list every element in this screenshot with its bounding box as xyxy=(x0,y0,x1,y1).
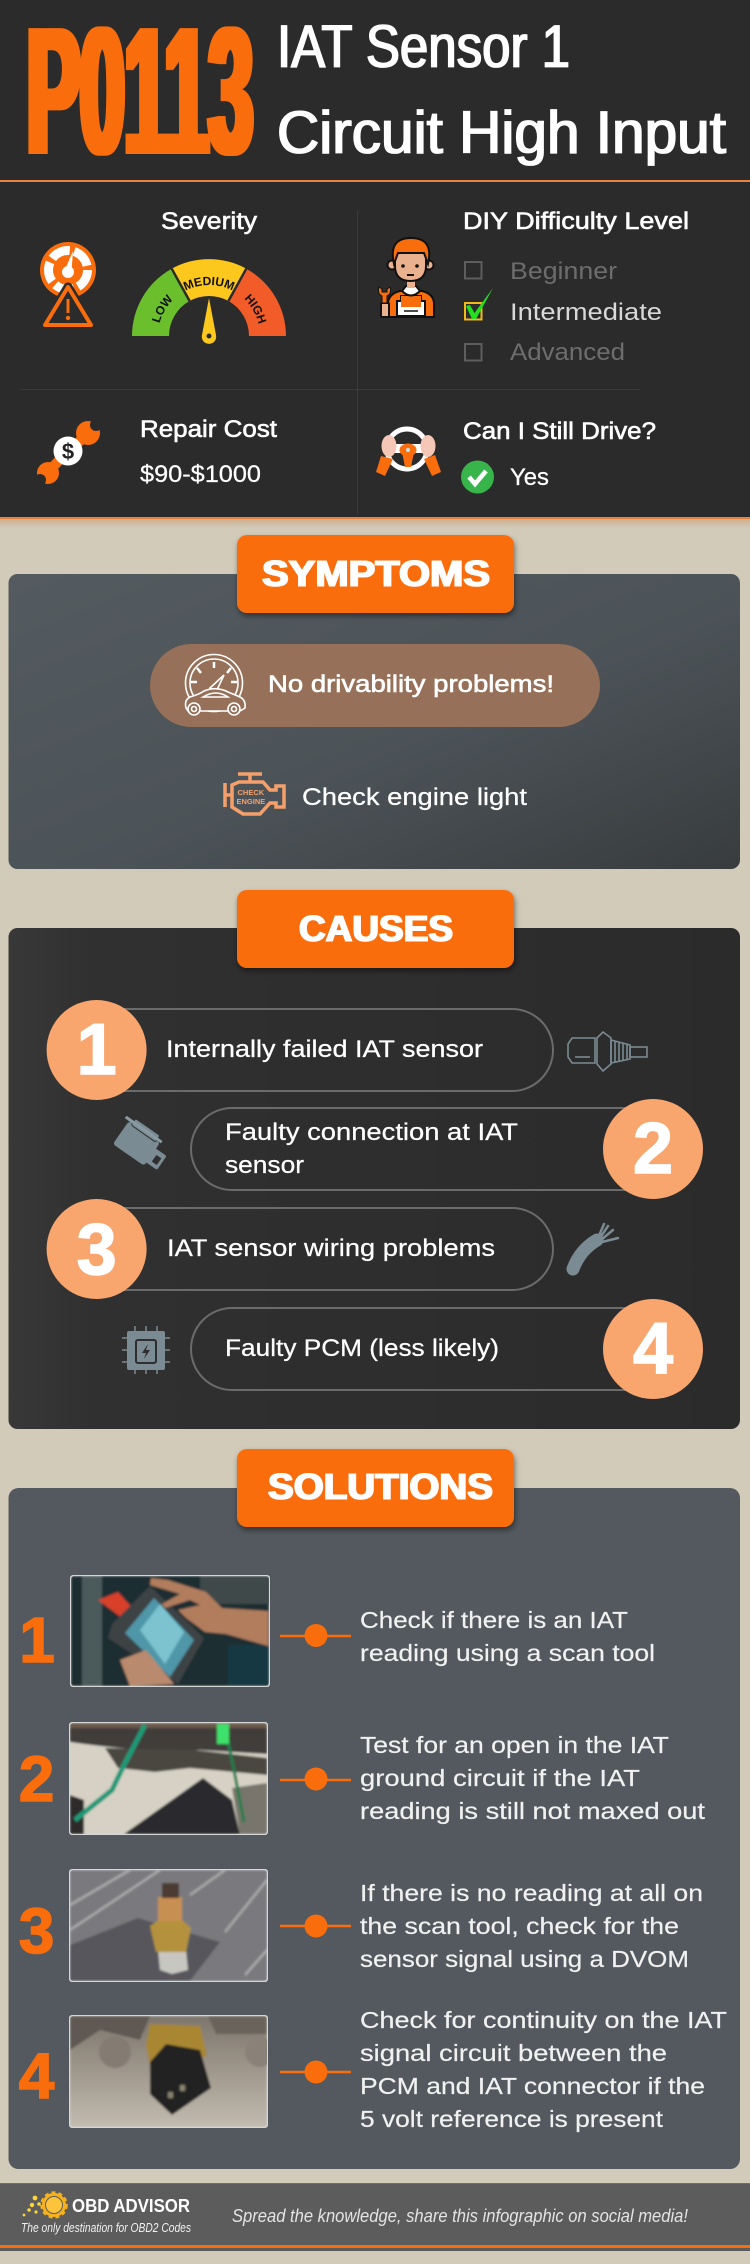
header panel xyxy=(0,0,750,528)
step 2 xyxy=(19,1722,706,1835)
photo: sensor on plate xyxy=(69,1869,268,1982)
can I still drive: Can I Still Drive? xyxy=(463,418,656,445)
difficulty heading: DIY Difficulty Level xyxy=(463,208,689,235)
cause 4 xyxy=(191,1299,703,1399)
footer xyxy=(0,2183,750,2251)
logo text: OBD ADVISOR xyxy=(72,2196,190,2216)
cause 3: IAT sensor wiring problems xyxy=(167,1235,495,1262)
icon: logo gear xyxy=(23,2192,67,2218)
cause 2: 2 xyxy=(633,1109,673,1189)
cause 2 xyxy=(191,1099,703,1199)
repair cost xyxy=(140,416,277,488)
icon: mechanic xyxy=(378,238,434,317)
severity meter xyxy=(132,259,286,344)
title xyxy=(277,13,726,166)
difficulty options: Advanced xyxy=(510,339,625,366)
step 3: If there is no reading at all on xyxy=(360,1880,703,1906)
difficulty options xyxy=(465,258,662,366)
heading: causes: CAUSES xyxy=(299,908,453,949)
step 4: 4 xyxy=(19,2040,55,2112)
icon: check engine xyxy=(225,774,284,814)
cause 2: sensor xyxy=(225,1152,304,1179)
step 1: Check if there is an IAT xyxy=(360,1607,628,1633)
cause 1: 1 xyxy=(77,1010,117,1090)
step 1 xyxy=(19,1575,655,1687)
step 1: reading using a scan tool xyxy=(360,1640,655,1666)
cause 2: Faulty connection at IAT xyxy=(225,1119,518,1146)
cause 4: 4 xyxy=(633,1309,673,1389)
icon: steering wheel with hands xyxy=(376,429,441,476)
symptom pill xyxy=(150,644,600,727)
icon: sensor xyxy=(568,1032,647,1071)
heading: causes xyxy=(237,890,514,968)
step 2: 2 xyxy=(19,1743,54,1815)
step 1: 1 xyxy=(19,1604,55,1676)
can I still drive xyxy=(461,418,656,494)
icon: wrench with dollar xyxy=(34,419,102,486)
icon: speedometer car xyxy=(186,654,245,715)
icon: check engine: ENGINE xyxy=(236,797,265,806)
heading: solutions xyxy=(237,1449,514,1527)
cause 3: 3 xyxy=(77,1210,117,1290)
step 4 xyxy=(19,2007,727,2132)
title: IAT Sensor 1 xyxy=(277,13,570,80)
photo: test light xyxy=(69,1722,268,1835)
symptom text: No drivability problems! xyxy=(268,671,554,698)
step 3: the scan tool, check for the xyxy=(360,1913,679,1939)
difficulty options: Beginner xyxy=(510,258,617,285)
photo: IAT connector xyxy=(69,2015,275,2128)
panel: solutions xyxy=(8,1488,740,2169)
step 3 xyxy=(19,1869,703,1982)
icon: wrench with dollar: $ xyxy=(62,439,74,464)
icon: chip xyxy=(122,1326,170,1374)
heading: symptoms xyxy=(237,535,514,613)
heading: solutions: SOLUTIONS xyxy=(268,1466,493,1507)
severity meter: LOW xyxy=(152,294,172,323)
icon: wire xyxy=(573,1224,618,1269)
step 2: Test for an open in the IAT xyxy=(360,1732,669,1758)
photo: scan tool xyxy=(70,1575,270,1687)
panel: causes xyxy=(8,928,740,1429)
cause 3 xyxy=(47,1199,553,1299)
step 4: PCM and IAT connector if the xyxy=(360,2073,705,2099)
cause 1 xyxy=(47,1000,553,1100)
icon: severity gauge warning xyxy=(40,242,96,325)
difficulty options: Intermediate xyxy=(510,299,662,326)
title: Circuit High Input xyxy=(277,99,726,166)
severity meter: MEDIUM xyxy=(183,276,235,290)
repair cost: $90-$1000 xyxy=(140,461,261,488)
step 4: Check for continuity on the IAT xyxy=(360,2007,727,2033)
heading: symptoms: SYMPTOMS xyxy=(262,553,490,594)
panel: symptoms xyxy=(8,574,740,869)
severity meter: HIGH xyxy=(244,294,266,324)
can I still drive: Yes xyxy=(510,464,549,491)
cause 4: Faulty PCM (less likely) xyxy=(225,1335,499,1362)
tagline: The only destination for OBD2 Codes xyxy=(21,2220,191,2235)
step 3: sensor signal using a DVOM xyxy=(360,1946,689,1972)
step 2: reading is still not maxed out xyxy=(360,1798,706,1824)
severity heading: Severity xyxy=(161,208,257,235)
step 4: 5 volt reference is present xyxy=(360,2106,664,2132)
step 4: signal circuit between the xyxy=(360,2040,667,2066)
symptom text: Check engine light xyxy=(302,784,527,811)
cause 1: Internally failed IAT sensor xyxy=(166,1036,483,1063)
icon: check engine: CHECK xyxy=(238,788,265,797)
repair cost: Repair Cost xyxy=(140,416,277,443)
share message: Spread the knowledge, share this infographic on social media! xyxy=(232,2206,688,2226)
step 3: 3 xyxy=(19,1895,54,1967)
icon: connector xyxy=(109,1113,174,1173)
step 2: ground circuit if the IAT xyxy=(360,1765,640,1791)
